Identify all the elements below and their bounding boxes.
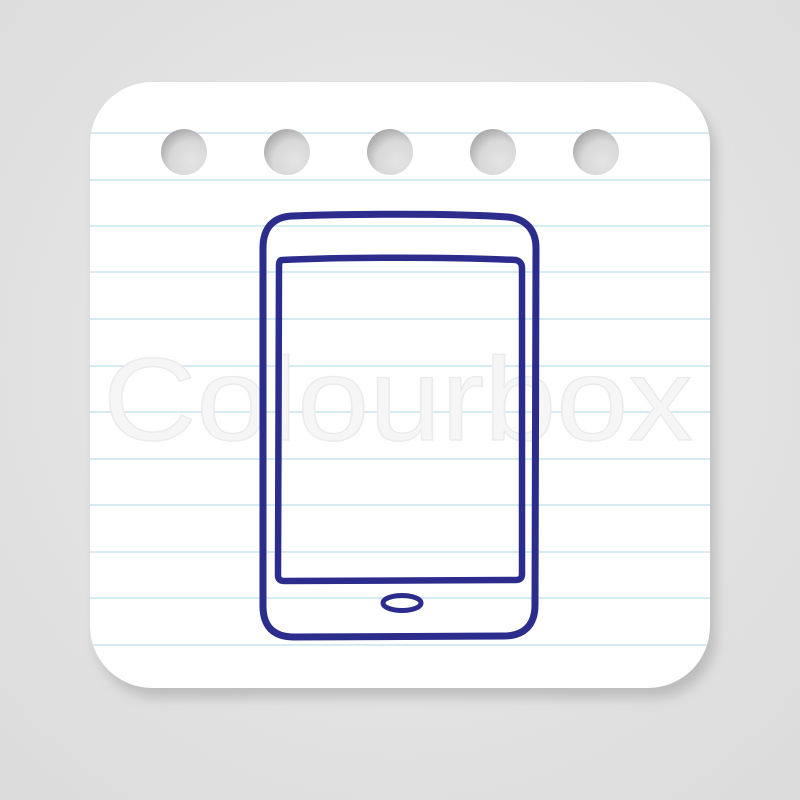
binder holes [161,129,619,175]
icon: tablet doodle [263,214,536,637]
panel: notepad card [90,82,716,698]
watermark text: Colourbox [103,334,693,466]
